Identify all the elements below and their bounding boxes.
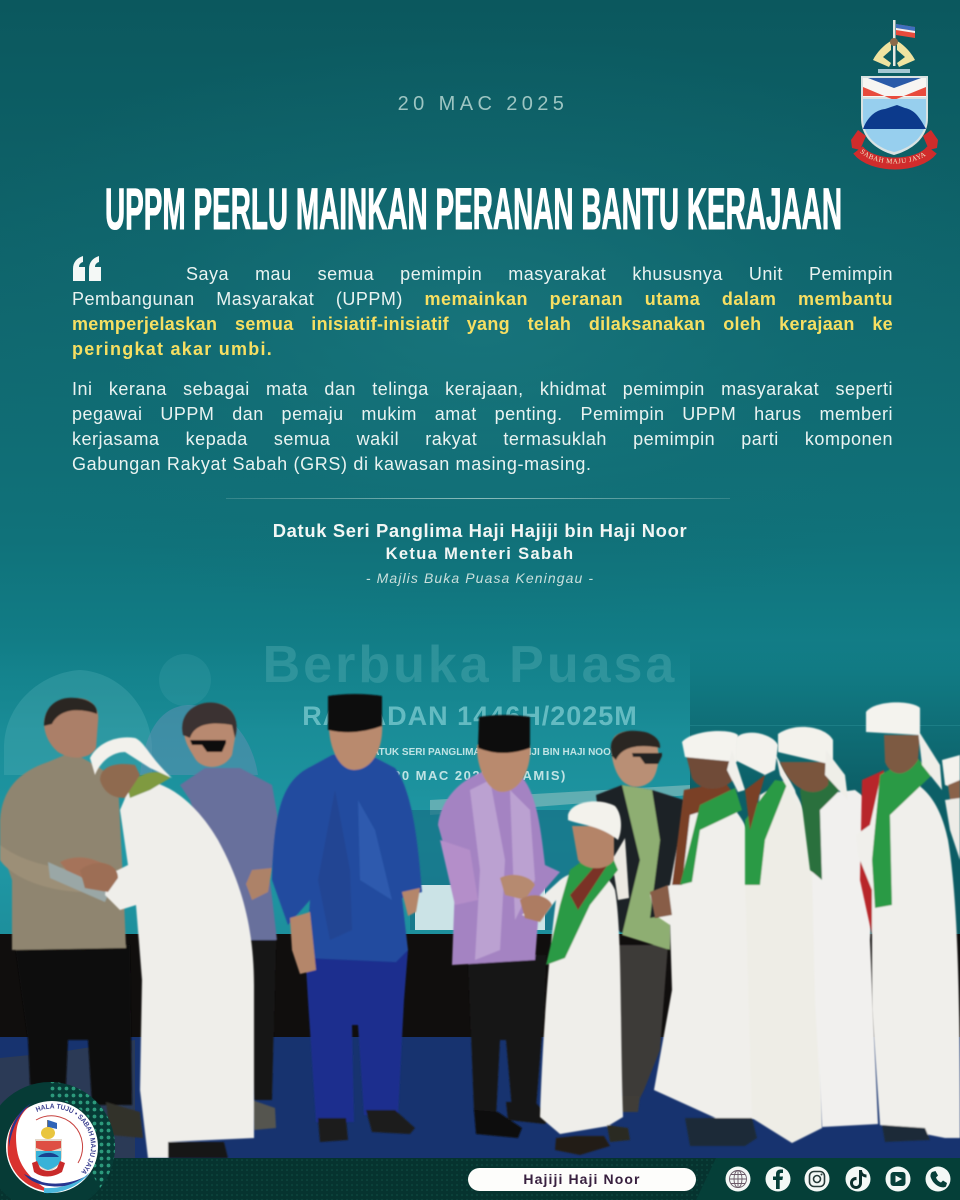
icon: globe [726,1166,750,1192]
footer bar [0,1158,960,1200]
crest arms [873,38,915,73]
logo: Sabah state crest [851,20,938,170]
person: man in grey shirt [0,698,143,1138]
badge: Hala Tuju Sabah Maju Jaya round logo: HALA TUJU • SABAH MAJU JAYA [36,1104,96,1174]
text block: attribution: - Majlis Buka Puasa Keningau - [366,570,594,586]
stage base and floor [0,934,960,1160]
backdrop banner: 20 MAC 2025 (KHAMIS) [393,768,567,783]
text block: quote paragraph one: Saya mau semua pemimpin masyarakat khususnya Unit Pemimpin [186,264,893,284]
text block: attribution: Datuk Seri Panglima Haji Hajiji bin Haji Noor [273,520,687,541]
red ribbon with motto: SABAH MAJU JAYA [860,150,926,164]
flag on pole [893,20,915,66]
text block: quote paragraph two: Ini kerana sebagai mata dan telinga kerajaan, khidmat pemimpin masyarakat seperti [72,379,893,399]
icon: instagram [804,1166,830,1192]
person: boy two in white robe and green scarf [735,733,822,1143]
date: 20 MAC 2025 [398,93,568,115]
person: man in blue baju melayu [272,694,422,1142]
divider [226,498,730,499]
icon: tiktok [846,1166,870,1192]
backdrop banner: RAMADAN 1446H/2025M [302,701,638,731]
text block: quote paragraph one: memperjelaskan semua inisiatif-inisiatif yang telah dilaksanakan oleh kerajaan ke [72,314,893,334]
person: boy at right edge [942,755,960,860]
text block: quote paragraph one: peringkat akar umbi. [72,339,273,359]
backdrop banner [0,636,960,940]
person: man in black vest [596,731,684,1112]
name pill: Hajiji Haji Noor: Hajiji Haji Noor [523,1171,641,1187]
icon: phone [926,1166,950,1192]
icon: facebook [766,1166,790,1192]
person: man in plaid shirt [180,703,280,1130]
red ribbon with motto [851,130,938,170]
text block: attribution: Ketua Menteri Sabah [386,545,574,563]
text block: quote paragraph one [72,264,893,359]
person: boy three in white robe and green scarf [778,727,878,1127]
text block: quote paragraph two: Gabungan Rakyat Sabah (GRS) di kawasan masing-masing. [72,454,592,474]
text block: quote paragraph two: kerjasama kepada semua wakil rakyat termasuklah pemimpin parti komponen [72,429,893,449]
person: boy one in white robe and green scarf [650,731,762,1146]
social media icons [726,1166,950,1192]
text block: quote paragraph two: pegawai UPPM dan pemaju mukim amat penting. Pemimpin UPPM harus memberi [72,404,893,424]
badge: Hala Tuju Sabah Maju Jaya round logo [0,1082,115,1200]
backdrop banner: YAB DATUK SERI PANGLIMA HAJI HAJIJI BIN HAJI NOOR [342,747,619,758]
icon: opening quote mark [73,256,101,281]
name pill: Hajiji Haji Noor [468,1168,696,1191]
person: small boy with green scarf [520,801,630,1155]
shield [861,76,928,155]
backdrop banner: Berbuka Puasa [263,636,677,694]
text block: quote paragraph one: Pembangunan Masyarakat (UPPM) memainkan peranan utama dalam membantu [72,289,893,309]
person: man in purple batik shirt [438,715,560,1138]
person: boy four in white robe and green scarf [856,702,960,1142]
icon: youtube play [886,1166,910,1192]
text block: quote paragraph two [72,379,893,474]
text block: attribution [273,520,687,586]
person: bowing boy in white robe [80,737,254,1158]
